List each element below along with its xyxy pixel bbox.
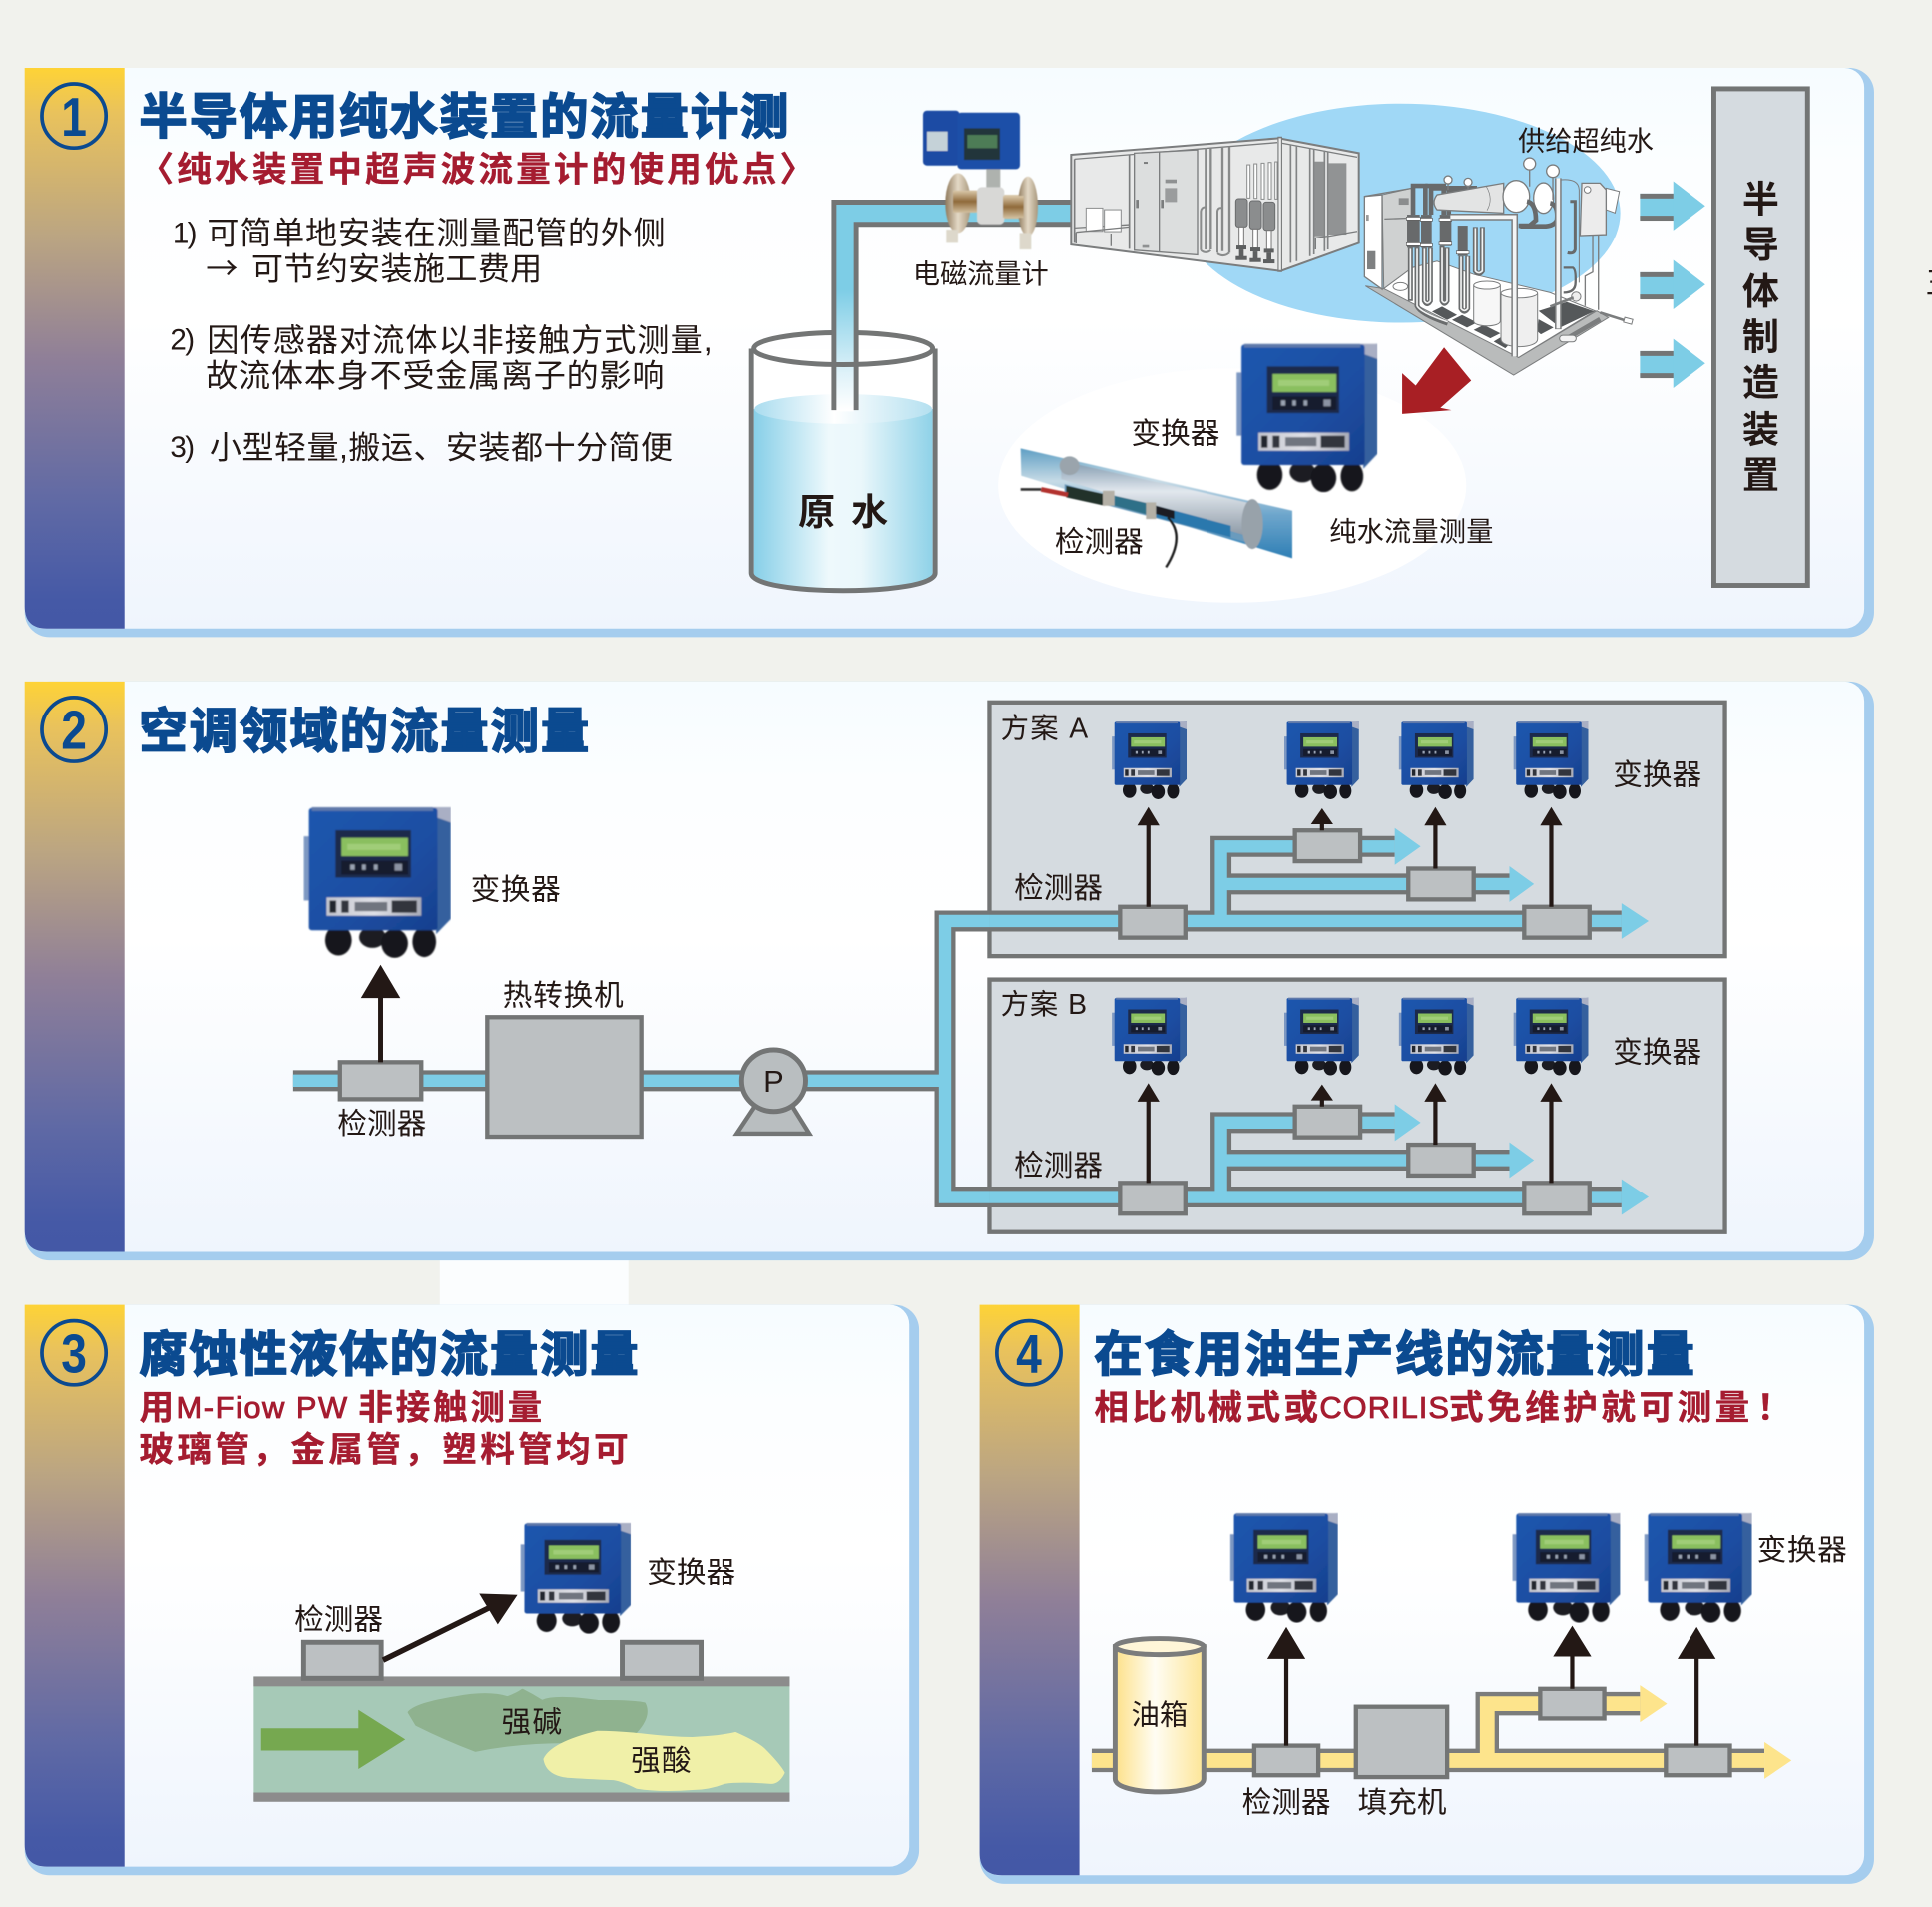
label: strong alkali: 强碱 [502, 1706, 562, 1739]
title: 空调领域的流量测量 [140, 705, 589, 758]
arrow 2 [1640, 260, 1705, 309]
scheme B box [986, 980, 1725, 1232]
signal arrows [1267, 1626, 1715, 1746]
advantages list: 2) [170, 324, 195, 357]
strong acid region [545, 1732, 783, 1790]
electromagnetic flowmeter [923, 111, 1038, 249]
subtitle: CORILIS [1319, 1390, 1449, 1425]
icon: converter [521, 1523, 631, 1634]
label: converter: 变换器 [1613, 1036, 1701, 1069]
label: pure water flow measurement: 纯水流量测量 [1329, 516, 1493, 547]
title: 腐蚀性液体的流量测量 [140, 1328, 639, 1382]
strong alkali region [409, 1690, 647, 1751]
icon: converter 1 [1230, 1513, 1338, 1623]
pure water skid container [1071, 137, 1359, 272]
number badge 4: 4 [1016, 1323, 1042, 1384]
label: strong acid: 强酸 [631, 1744, 692, 1777]
advantages list: 可简单地安装在测量配管的外侧 [207, 216, 666, 251]
panel 1: semiconductor pure water flow measurement [25, 68, 1874, 637]
raw water tank: 原 [798, 491, 835, 533]
label: detector: 检测器 [1242, 1786, 1330, 1819]
pipe cross-section [253, 1676, 789, 1802]
panel 4: edible oil line flow measurement [980, 1305, 1874, 1884]
semiconductor equipment box: 导 [1742, 224, 1779, 265]
advantages list: 故流体本身不受金属离子的影响 [206, 358, 664, 394]
blue ellipse background [1182, 104, 1621, 323]
icon: converter [304, 807, 451, 958]
number badge 3 [42, 1321, 106, 1385]
white ellipse background [998, 368, 1466, 603]
panel 2: air conditioning flow measurement [25, 682, 1874, 1260]
label: detector: 检测器 [1055, 526, 1144, 559]
title: 半导体用纯水装置的流量计测 [140, 90, 788, 144]
semiconductor equipment box: 半 [1742, 178, 1779, 220]
label: detector: 检测器 [294, 1603, 383, 1636]
detector box left [340, 1062, 421, 1099]
number badge 4 [997, 1321, 1061, 1385]
advantages list: 可节约安装施工费用 [251, 250, 542, 286]
label: filling machine: 填充机 [1358, 1786, 1447, 1819]
subtitle: 相比机械式或 [1094, 1389, 1318, 1427]
pump [736, 1050, 809, 1134]
label: electromagnetic flowmeter: 电磁流量计 [913, 258, 1049, 289]
icon: converter 2 [1513, 1513, 1621, 1623]
label: converter: 变换器 [1131, 418, 1219, 451]
oil pipes [1092, 1685, 1791, 1779]
subtitle lines: M-Fiow PW [177, 1390, 348, 1425]
pump: P [763, 1064, 784, 1099]
subtitle: 〈纯水装置中超声波流量计的使用优点〉 [140, 152, 814, 190]
sensor pipe photo [1021, 448, 1292, 567]
pure water system machine [1364, 158, 1633, 375]
pipe arrows [1395, 1104, 1649, 1214]
flow arrow [261, 1710, 405, 1769]
advantages list: 因传感器对流体以非接触方式测量, [207, 322, 713, 358]
advantages list: → [206, 243, 238, 289]
scheme A box [986, 703, 1725, 956]
subtitle lines: 玻璃管，金属管，塑料管均可 [140, 1431, 629, 1469]
detectors [1254, 1689, 1730, 1775]
detector left [303, 1642, 381, 1678]
number badge 2 [42, 698, 106, 761]
arrow to converter [383, 1593, 518, 1660]
detector right [623, 1642, 702, 1678]
subtitle: ！ [1757, 1389, 1791, 1427]
icon: converter [1236, 344, 1377, 492]
title: 在食用油生产线的流量测量 [1094, 1328, 1694, 1382]
label: detector: 检测器 [337, 1108, 426, 1141]
advantages list [170, 216, 713, 465]
label: scheme A: 方案 A [1001, 714, 1088, 745]
label: heat exchanger: 热转换机 [503, 980, 624, 1013]
number badge 3: 3 [61, 1323, 87, 1384]
raw water tank: 水 [851, 491, 888, 533]
semiconductor equipment box: 体 [1742, 270, 1779, 312]
semiconductor equipment box: 装 [1742, 408, 1779, 450]
filling machine [1356, 1707, 1447, 1777]
label: converter: 变换器 [1757, 1534, 1847, 1567]
main pipe network [293, 921, 989, 1197]
scheme A detectors, arrows and converters [1112, 721, 1590, 938]
subtitle: 式免维护就可测量 [1449, 1389, 1749, 1427]
pipe arrows [1395, 828, 1649, 939]
scheme B detectors, arrows and converters [1112, 998, 1590, 1213]
oil tank [1115, 1639, 1204, 1792]
subtitle [1094, 1389, 1791, 1427]
arrow 3 [1640, 339, 1705, 388]
subtitle lines [140, 1389, 629, 1469]
arrow up to converter [361, 965, 400, 1062]
semiconductor equipment box [1713, 89, 1807, 586]
label: scheme B: 方案 B [1001, 989, 1087, 1021]
arrows to semiconductor equipment [1640, 182, 1705, 388]
number badge 2: 2 [61, 700, 87, 761]
red arrow [1402, 347, 1471, 414]
subtitle lines: 用 [140, 1389, 174, 1427]
icon: converter 3 [1645, 1513, 1752, 1623]
semiconductor equipment box: 造 [1742, 361, 1779, 403]
label: converter: 变换器 [647, 1556, 735, 1589]
raw water tank [751, 214, 1072, 591]
label: detector: 检测器 [1014, 1150, 1103, 1183]
label: oil tank: 油箱 [1131, 1700, 1188, 1732]
label: converter: 变换器 [1613, 759, 1701, 792]
advantages list: 3) [170, 431, 195, 464]
label: converter: 变换器 [471, 873, 561, 906]
heat exchanger [487, 1017, 642, 1137]
advantages list: 1) [173, 217, 198, 249]
white patch between panels [440, 1256, 629, 1308]
panel 3: corrosive liquid flow measurement [25, 1305, 919, 1875]
semiconductor equipment box: 制 [1742, 316, 1779, 358]
advantages list: 小型轻量,搬运、安装都十分简便 [210, 429, 673, 465]
arrow 1 [1640, 182, 1705, 231]
number badge 1: 1 [61, 86, 87, 148]
semiconductor equipment box: 置 [1742, 454, 1779, 496]
label: detector: 检测器 [1014, 872, 1103, 905]
number badge 1 [42, 84, 106, 148]
label: ultra pure water supply: 供给超纯水 [1518, 126, 1654, 157]
subtitle lines: 非接触测量 [358, 1389, 542, 1427]
